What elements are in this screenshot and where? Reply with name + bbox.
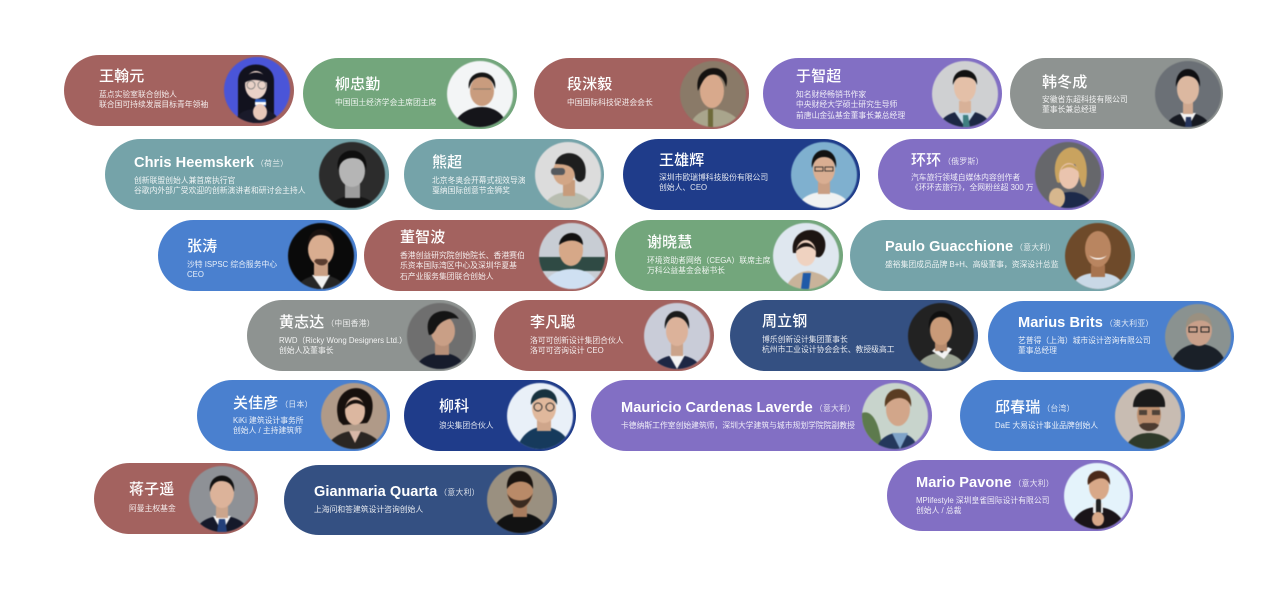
role: 深圳市欧瑞博科技股份有限公司 xyxy=(659,173,768,182)
name: Paulo Guacchione （意大利） xyxy=(885,239,1056,255)
name: 柳忠勤 xyxy=(335,76,380,93)
name: 谢晓慧 xyxy=(647,234,692,251)
panel: 周立钢 xyxy=(730,300,978,371)
role: 洛可可咨询设计 CEO xyxy=(530,346,604,355)
role: 联合国可持续发展目标青年领袖 xyxy=(99,100,208,109)
portrait xyxy=(506,382,574,450)
portrait xyxy=(1064,222,1132,290)
role: 阿曼主权基金 xyxy=(129,504,176,513)
role: 前唐山金弘基金董事长兼总经理 xyxy=(796,111,905,120)
role xyxy=(233,416,304,435)
portrait xyxy=(1164,304,1232,371)
role: 石产业服务集团联合创始人 xyxy=(400,272,494,281)
panel: Paulo Guacchione xyxy=(850,220,1135,291)
panel: 关佳彦 xyxy=(197,380,390,451)
role xyxy=(911,173,1034,192)
portrait xyxy=(643,302,711,370)
role: 董事长兼总经理 xyxy=(1042,105,1097,114)
role xyxy=(99,90,208,109)
name: 韩冬成 xyxy=(1042,74,1087,91)
role: 董事总经理 xyxy=(1018,346,1057,355)
role xyxy=(916,496,1049,517)
role: 杭州市工业设计协会会长、教授级高工 xyxy=(762,345,895,354)
role: DaE 大易设计事业品牌创始人 xyxy=(995,421,1098,430)
panel: 韩冬成 xyxy=(1010,58,1223,129)
name: 张涛 xyxy=(187,238,217,255)
role: 中央财经大学硕士研究生导师 xyxy=(796,100,897,109)
role: 蓝点实验室联合创始人 xyxy=(99,90,177,99)
panel: 李凡聪 xyxy=(494,300,714,371)
name: 王翰元 xyxy=(99,68,144,85)
role xyxy=(796,90,905,120)
portrait xyxy=(538,222,606,290)
name: 董智波 xyxy=(400,229,445,246)
role xyxy=(647,256,770,275)
role: 博乐创新设计集团董事长 xyxy=(762,335,848,344)
portrait xyxy=(1115,383,1181,449)
role: 盛裕集团成员品牌 B+H、高级董事，资深设计总监 xyxy=(885,260,1058,269)
name: 于智超 xyxy=(796,68,841,85)
role: KiKi 建筑设计事务所 xyxy=(233,416,304,425)
role xyxy=(134,176,306,195)
portrait xyxy=(680,61,746,128)
portrait xyxy=(1064,463,1130,529)
role: CEO xyxy=(187,270,204,279)
role: 知名财经畅销书作家 xyxy=(796,90,866,99)
portrait xyxy=(907,302,975,370)
portrait xyxy=(487,467,553,533)
role: RWD（Ricky Wong Designers Ltd.） xyxy=(279,336,407,345)
role: 乐资本国际湾区中心及深圳华夏基 xyxy=(400,261,517,270)
panel: Mauricio Cardenas Laverde xyxy=(591,380,932,451)
portrait xyxy=(862,383,928,449)
role: 沙特 ISPSC 综合服务中心 xyxy=(187,260,277,269)
role: 卡德纳斯工作室创始建筑师，深圳大学建筑与城市规划学院院副教授 xyxy=(621,421,855,430)
panel: 谢晓慧 xyxy=(615,220,843,291)
role xyxy=(279,336,407,355)
portrait xyxy=(772,222,840,290)
portrait xyxy=(790,141,858,209)
portrait xyxy=(1154,60,1222,128)
name: Gianmaria Quarta （意大利） xyxy=(314,484,480,500)
role xyxy=(187,260,277,279)
panel: Chris Heemskerk xyxy=(105,139,389,210)
role: 戛纳国际创意节金狮奖 xyxy=(432,186,510,195)
panel: 邱春瑞 xyxy=(960,380,1185,451)
panel: 段洣毅 xyxy=(534,58,749,129)
role: 中国国际科技促进会会长 xyxy=(567,98,653,107)
role: 谷歌内外部广受欢迎的创新演讲者和研讨会主持人 xyxy=(134,186,306,195)
name: 段洣毅 xyxy=(567,76,612,93)
role: 创始人 / 主持建筑师 xyxy=(233,426,302,435)
role: 浪尖集团合伙人 xyxy=(439,421,494,430)
portrait xyxy=(1034,142,1102,209)
portrait xyxy=(287,222,355,290)
portrait xyxy=(406,302,474,370)
role: 创始人、CEO xyxy=(659,183,707,192)
role: 北京冬奥会开幕式视效导演 xyxy=(432,176,526,185)
role xyxy=(1018,336,1151,355)
name: 柳科 xyxy=(439,398,469,415)
name: Chris Heemskerk （荷兰） xyxy=(134,155,288,171)
name: 邱春瑞 （台湾） xyxy=(995,399,1075,416)
name: 李凡聪 xyxy=(530,314,575,331)
portrait xyxy=(189,466,255,532)
portrait xyxy=(932,60,998,128)
name: 环环 （俄罗斯） xyxy=(911,152,984,169)
name: 王雄辉 xyxy=(659,152,704,169)
panel: 董智波 xyxy=(364,220,608,291)
panel: 柳科 xyxy=(404,380,576,451)
role: 汽车旅行领域自媒体内容创作者 xyxy=(911,173,1020,182)
role: 万科公益基金会秘书长 xyxy=(647,266,725,275)
portrait xyxy=(318,141,386,209)
role xyxy=(1042,95,1128,114)
role: 安徽省东超科技有限公司 xyxy=(1042,95,1128,104)
role: 创新联盟创始人兼首席执行官 xyxy=(134,176,235,185)
role: 上海问和答建筑设计咨询创始人 xyxy=(314,505,423,514)
name: Mario Pavone （意大利） xyxy=(916,475,1054,491)
panel: 于智超 xyxy=(763,58,1002,129)
panel: 王翰元 xyxy=(64,55,294,126)
role xyxy=(659,173,768,192)
role: 创始人 / 总裁 xyxy=(916,506,961,515)
portrait xyxy=(320,382,388,450)
panel: Marius Brits xyxy=(988,301,1234,372)
panel: 蒋子遥 xyxy=(94,463,258,534)
panel: 环环 xyxy=(878,139,1104,210)
role: MPlifestyle 深圳皇雀国际设计有限公司 xyxy=(916,496,1049,505)
portrait xyxy=(534,142,602,208)
panel: Gianmaria Quarta xyxy=(284,465,557,535)
name: 黄志达 （中国香港） xyxy=(279,314,375,331)
role: 环境资助者网络（CEGA）联席主席 xyxy=(647,256,770,265)
name: 熊超 xyxy=(432,154,462,171)
role: 洛可可创新设计集团合伙人 xyxy=(530,336,624,345)
role xyxy=(530,336,624,355)
name: 蒋子遥 xyxy=(129,481,174,498)
panel: Mario Pavone xyxy=(887,460,1133,531)
role xyxy=(400,251,525,281)
panel: 熊超 xyxy=(404,139,604,210)
name: Marius Brits （澳大利亚） xyxy=(1018,315,1154,331)
role: 中国国土经济学会主席团主席 xyxy=(335,98,436,107)
panel: 张涛 xyxy=(158,220,357,291)
panel: 王雄辉 xyxy=(623,139,860,210)
role: 创始人及董事长 xyxy=(279,346,334,355)
role: 香港创益研究院创始院长、香港赛伯 xyxy=(400,251,525,260)
name: 关佳彦 （日本） xyxy=(233,395,313,412)
name: Mauricio Cardenas Laverde （意大利） xyxy=(621,400,855,416)
panel: 柳忠勤 xyxy=(303,58,517,129)
portrait xyxy=(446,60,514,128)
role xyxy=(762,335,895,354)
panel: 黄志达 xyxy=(247,300,476,371)
name: 周立钢 xyxy=(762,313,807,330)
role: 《环环去旅行》，全网粉丝超 300 万 xyxy=(911,183,1034,192)
portrait xyxy=(223,56,291,124)
role xyxy=(432,176,526,195)
role: 艺普得（上海）城市设计咨询有限公司 xyxy=(1018,336,1151,345)
